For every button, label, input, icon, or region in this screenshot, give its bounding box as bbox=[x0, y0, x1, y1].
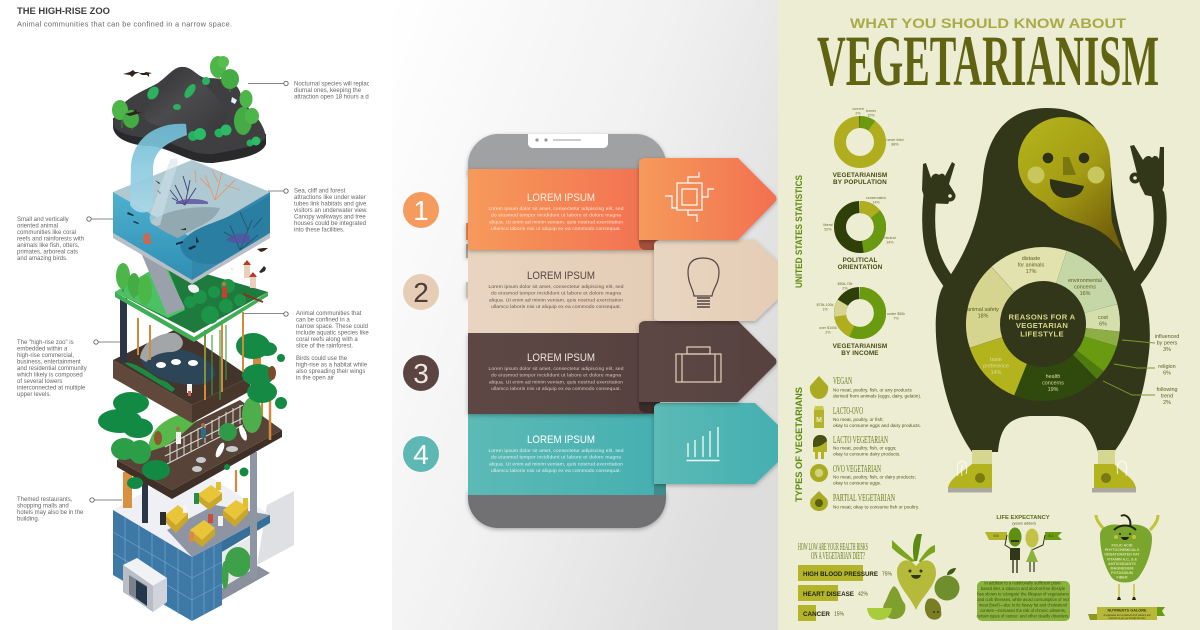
band 1: orange: aliqua. Ut enim ad minim veniam, quis nostrud exercitation bbox=[489, 219, 623, 225]
type: vegan: VEGAN bbox=[833, 376, 852, 387]
text block: life expectancy: certain types of cancer, and other deadly disorders. bbox=[977, 614, 1069, 618]
step number 2: 2 bbox=[413, 277, 429, 308]
type: ovo vegetarian: No meat, poultry, fish, or dairy products; bbox=[833, 474, 916, 480]
donut chart: political orientation: 34% bbox=[886, 240, 894, 244]
donut chart: vegetarianism by income: $50k-75k bbox=[838, 282, 853, 286]
text block: life expectancy bbox=[977, 580, 1070, 621]
band 2: beige bbox=[468, 250, 654, 333]
icon: egg bbox=[810, 464, 828, 482]
callout: animal communities and birds bbox=[243, 311, 369, 382]
band 2: beige: Lorem ipsum dolor sit amet, consectetur adipiscing elit, sed bbox=[488, 284, 624, 290]
callout: nocturnal species bbox=[248, 81, 375, 100]
leader lines and outside labels: religion bbox=[1158, 364, 1176, 370]
donut chart: vegetarianism by income: $75k-100k bbox=[817, 303, 834, 307]
entrance bbox=[123, 558, 167, 586]
donut chart: vegetarianism by income: 2% bbox=[842, 286, 848, 290]
phone notch bbox=[528, 134, 608, 148]
waterfall bbox=[130, 124, 187, 226]
donut chart: political orientation: liberal bbox=[823, 223, 833, 227]
donut centre label: LIFESTYLE bbox=[1020, 330, 1064, 338]
section: health risks bbox=[798, 542, 893, 621]
callout: high-rise zoo embedded bbox=[16, 340, 120, 398]
bar: heart disease: HEART DISEASE bbox=[803, 591, 855, 598]
callout: animal communities and birds: in the open air bbox=[296, 376, 334, 382]
type: lacto vegetarian: No meat, poultry, fish, or eggs; bbox=[833, 446, 896, 450]
type: ovo vegetarian: OVO VEGETARIAN bbox=[833, 464, 881, 475]
text block: life expectancy: based diet, a tobacco and alcohol-free lifestyle bbox=[981, 586, 1066, 591]
callout: themed restaurants bbox=[17, 497, 122, 522]
donut segment labels: concerns bbox=[1074, 284, 1096, 290]
text block: life expectancy: content—increases the risk of chronic ailments, bbox=[980, 608, 1066, 613]
heading: life expectancy bbox=[996, 515, 1050, 526]
section: health risks: HOW LOW ARE YOUR HEALTH RISKS bbox=[798, 542, 868, 553]
ground floor building bbox=[113, 452, 270, 621]
icon: bar chart bbox=[686, 427, 720, 460]
aquarium tank bbox=[113, 160, 270, 284]
chute below the tank bbox=[142, 253, 185, 315]
section: health risks: ON A VEGETARIAN DIET? bbox=[811, 551, 865, 562]
pepper character: MAGNESIUM bbox=[1111, 566, 1133, 570]
step number 2 bbox=[403, 274, 439, 310]
callout: small and vertically oriented: animals like fish, otters, bbox=[17, 243, 80, 249]
donut chart: vegetarianism by income: under $50k bbox=[887, 312, 905, 316]
floating mountain island bbox=[112, 56, 266, 163]
icon: milk carton: M bbox=[816, 417, 822, 424]
banner: nutrients galore: A vegetarian diet is packed full of vitamins and bbox=[1103, 614, 1151, 617]
step number 3 bbox=[403, 355, 439, 391]
pepper character: FIBER bbox=[1116, 576, 1128, 580]
birds over the mountain bbox=[123, 70, 152, 116]
donut centre label: VEGETARIAN bbox=[1016, 321, 1068, 330]
flag 2: beige bulb bbox=[654, 240, 778, 321]
callout: sea, cliff and forest: visitors an underwater view. bbox=[294, 208, 368, 214]
panel: vegetarianism infographic bbox=[778, 0, 1200, 630]
couple with flags: 9.5 bbox=[994, 534, 998, 538]
donut chart: political orientation bbox=[823, 196, 896, 271]
donut chart: vegetarianism by population: never tried bbox=[887, 138, 903, 142]
band 1: orange: do eiusmod tempor incididunt ut labore et dolore magna bbox=[491, 213, 621, 219]
leader lines and outside labels: 3% bbox=[1163, 347, 1171, 353]
band 1: orange: Lorem ipsum dolor sit amet, consectetur adipiscing elit, sed bbox=[488, 206, 624, 212]
character: smiling avocado-like figure bbox=[922, 108, 1179, 492]
callout: themed restaurants: shopping malls and bbox=[17, 504, 69, 510]
couple with flags: 6.1 bbox=[1048, 534, 1054, 538]
callout: animal communities and birds: can be confined in a bbox=[296, 318, 350, 324]
donut segment labels: health bbox=[1046, 374, 1060, 380]
callout: small and vertically oriented: communities like coral bbox=[17, 230, 76, 236]
callout: animal communities and birds: include aquatic species like bbox=[296, 330, 369, 336]
banner: nutrients galore bbox=[1088, 607, 1165, 620]
band 2: beige: do eiusmod tempor incididunt ut labore et dolore magna bbox=[491, 291, 621, 297]
donut segment labels: taste bbox=[990, 357, 1002, 363]
heading: life expectancy: LIFE EXPECTANCY bbox=[996, 515, 1050, 521]
callout: themed restaurants: building. bbox=[17, 516, 40, 522]
donut segment labels: environmental bbox=[1068, 278, 1102, 284]
callout: high-rise zoo embedded: embedded within a bbox=[17, 346, 68, 352]
band 4: teal bbox=[468, 414, 666, 495]
leader lines and outside labels: influenced bbox=[1155, 334, 1179, 340]
donut segment labels: concerns bbox=[1042, 380, 1064, 386]
bar: cancer: CANCER bbox=[803, 611, 830, 618]
callout: small and vertically oriented: Small and vertically bbox=[17, 217, 69, 223]
type: lacto-ovo: No meat, poultry, or fish; bbox=[833, 417, 884, 422]
callout: small and vertically oriented: and amazing birds. bbox=[17, 256, 68, 262]
poles and vines bbox=[120, 298, 243, 400]
donut chart: vegetarianism by population: 88% bbox=[891, 142, 899, 146]
callout: sea, cliff and forest: Canopy walkways and tree bbox=[294, 214, 366, 220]
heading: health risks bbox=[798, 542, 868, 562]
arms and hands bbox=[922, 145, 1164, 284]
pepper character: FOLIC ACID bbox=[1112, 544, 1133, 548]
donut chart: political orientation: conservative bbox=[866, 196, 886, 200]
subtitle: Animal communities that can be confined in a narrow space. bbox=[17, 20, 232, 28]
bar: cancer: 15% bbox=[834, 612, 845, 618]
band 3: brown: ullamco laboris nisi ut aliquip ex ea commodo consequat. bbox=[491, 386, 621, 392]
bar: high blood pressure: 75% bbox=[882, 572, 893, 578]
coral bbox=[170, 176, 196, 205]
right leg and shoe bbox=[1092, 450, 1136, 492]
restaurant tables and guests bbox=[160, 482, 248, 547]
callout: high-rise zoo embedded: The "high-rise zoo" is bbox=[17, 340, 74, 346]
bar: high blood pressure: HIGH BLOOD PRESSURE bbox=[803, 571, 879, 578]
donut chart: vegetarianism by income: BY INCOME bbox=[841, 350, 879, 357]
flag 4: teal chart bbox=[654, 403, 778, 484]
donut chart: political orientation: neutral bbox=[884, 236, 896, 240]
type: ovo vegetarian: okay to consume eggs. bbox=[833, 480, 881, 486]
callout: sea, cliff and forest: Sea, cliff and forest bbox=[294, 188, 346, 194]
donut chart: vegetarianism by income: VEGETARIANISM bbox=[833, 343, 887, 350]
donut chart: vegetarianism by population: VEGETARIANISM bbox=[833, 172, 887, 179]
pepper character: ANTIOXIDANTS bbox=[1108, 562, 1136, 566]
band 4: teal: do eiusmod tempor incididunt ut labore et dolore magna bbox=[491, 455, 621, 461]
donut chart: vegetarianism by income: over $100k bbox=[819, 326, 837, 330]
fold ribbons bbox=[639, 238, 666, 495]
donut segment labels: preference bbox=[983, 364, 1009, 370]
donut chart: reasons for a vegetarian lifestyle bbox=[958, 239, 1128, 409]
callout: sea, cliff and forest: houses could be integrated bbox=[294, 221, 366, 227]
flag 1: orange chip bbox=[639, 158, 776, 240]
callout: small and vertically oriented: oriented animal bbox=[17, 224, 58, 230]
callout: small and vertically oriented: reefs and rainforests with bbox=[17, 236, 84, 242]
callout: animal communities and birds: narrow space. These could bbox=[296, 324, 368, 330]
icon: light bulb bbox=[688, 258, 719, 307]
callout: animal communities and birds: Birds could use the bbox=[296, 356, 348, 362]
green rooftop platform bbox=[115, 248, 268, 342]
callout: themed restaurants: hotels may also be in the bbox=[17, 510, 84, 516]
donut chart: political orientation: 14% bbox=[872, 200, 880, 204]
pepper character: POTASSIUM bbox=[1111, 571, 1133, 575]
callout: high-rise zoo embedded: business, entertainment bbox=[17, 360, 81, 366]
donut chart: vegetarianism by population: 2% bbox=[855, 112, 861, 116]
donut chart: vegetarianism by population: 10% bbox=[867, 114, 875, 118]
title: the high-rise zoo: THE HIGH-RISE ZOO bbox=[17, 6, 110, 16]
donut centre label: REASONS FOR A bbox=[1009, 312, 1076, 322]
vertical label: types of vegetarians: TYPES OF VEGETARIANS bbox=[794, 387, 805, 502]
donut chart: vegetarianism by income: 7% bbox=[893, 316, 899, 320]
callout: sea, cliff and forest: attractions like under water bbox=[294, 195, 366, 201]
type: partial vegetarian bbox=[810, 491, 919, 511]
donut segment labels bbox=[967, 256, 1108, 393]
callout: high-rise zoo embedded: interconnected at multiple bbox=[17, 386, 86, 392]
illustration: beet and friends bbox=[867, 534, 960, 620]
icon: leaf bbox=[810, 376, 828, 399]
step number 3: 3 bbox=[413, 358, 429, 389]
type: lacto-ovo: okay to consume eggs and dairy products. bbox=[833, 423, 921, 428]
donut segment labels: animal safety bbox=[967, 307, 999, 313]
callout: sea, cliff and forest: into these facilities. bbox=[294, 228, 345, 234]
donut chart: political orientation: POLITICAL bbox=[842, 257, 878, 264]
pepper character: UNSATURATED FAT bbox=[1104, 552, 1140, 556]
bar: high blood pressure bbox=[798, 565, 893, 581]
donut chart: vegetarianism by population: former bbox=[866, 109, 877, 113]
icon: fish drop bbox=[810, 491, 828, 511]
body silhouette bbox=[936, 108, 1150, 452]
band 3: brown: Lorem ipsum dolor sit amet, consectetur adipiscing elit, sed bbox=[488, 366, 624, 372]
callout: high-rise zoo embedded: upper levels. bbox=[17, 392, 51, 398]
section: nutrients pepper bbox=[1088, 515, 1165, 620]
donut segment labels: 6% bbox=[1099, 322, 1107, 328]
type: lacto-ovo bbox=[814, 406, 921, 428]
donut centre label bbox=[1009, 312, 1076, 338]
band 2: beige: ullamco laboris nisi ut aliquip ex ea commodo consequat. bbox=[491, 304, 621, 310]
callout: animal communities and birds: high-rise as a habitat while bbox=[296, 362, 368, 368]
donut segment labels: 16% bbox=[1080, 291, 1091, 297]
section: life expectancy bbox=[977, 515, 1070, 621]
couple with flags bbox=[985, 528, 1062, 573]
bar: heart disease: 42% bbox=[858, 592, 869, 598]
banner: nutrients galore: nutrients to get you through the day! bbox=[1109, 617, 1146, 620]
donut chart: vegetarianism by income bbox=[817, 282, 905, 357]
donut segment labels: cost bbox=[1098, 315, 1108, 321]
pond platform bbox=[113, 328, 250, 423]
callout: sea, cliff and forest: tubes link habitats and give bbox=[294, 202, 367, 208]
band 4: teal: ullamco laboris nisi ut aliquip ex ea commodo consequat. bbox=[491, 468, 621, 474]
leader lines and outside labels: by peers bbox=[1157, 340, 1178, 346]
callout: nocturnal species: attraction open 18 hours a day bbox=[294, 94, 375, 100]
type: lacto vegetarian bbox=[813, 435, 900, 459]
face bbox=[1018, 117, 1123, 253]
pepper character: VITAMIN A,C, & E bbox=[1107, 558, 1138, 562]
callout: high-rise zoo embedded: of several towers bbox=[17, 379, 62, 385]
donut chart: political orientation: 52% bbox=[824, 228, 832, 232]
leader lines and outside labels: 2% bbox=[1163, 400, 1171, 406]
boardwalk platform bbox=[117, 370, 282, 508]
illustration: isometric high-rise zoo bbox=[98, 56, 294, 621]
band 1: orange: ullamco laboris nisi ut aliquip ex ea commodo consequat. bbox=[491, 226, 621, 232]
donut segment labels: 18% bbox=[978, 314, 989, 320]
donut chart: political orientation: ORIENTATION bbox=[838, 264, 883, 271]
callout: nocturnal species: diurnal ones, keeping the bbox=[294, 88, 362, 94]
type: lacto vegetarian: okay to consume dairy products. bbox=[833, 452, 900, 456]
tree canopy beside the pond bbox=[236, 333, 287, 440]
donut segment labels: 14% bbox=[991, 370, 1002, 376]
band 2: beige: LOREM IPSUM bbox=[527, 270, 595, 282]
callout: themed restaurants: Themed restaurants, bbox=[17, 497, 73, 503]
pepper character bbox=[1096, 515, 1158, 600]
callout: high-rise zoo embedded: high-rise commercial, bbox=[17, 353, 74, 359]
bar: heart disease bbox=[798, 585, 869, 601]
leader lines and outside labels: following bbox=[1157, 387, 1177, 393]
panel: the high-rise zoo bbox=[17, 8, 369, 621]
panel: phone infographic bbox=[392, 0, 778, 630]
text block: life expectancy: and curb illnesses, while avoid consumption of red bbox=[977, 597, 1069, 602]
callout: nocturnal species: Nocturnal species will replace bbox=[294, 82, 374, 88]
banner: nutrients galore: NUTRIENTS GALORE bbox=[1107, 608, 1147, 612]
donut segment labels: 17% bbox=[1026, 269, 1037, 275]
band 3: brown bbox=[468, 333, 654, 414]
vertical label: united states statistics: UNITED STATES STATISTICS bbox=[794, 175, 805, 288]
callout: animal communities and birds: slice of the rainforest. bbox=[296, 344, 353, 350]
pepper character: PHYTOCHEMICALS bbox=[1105, 548, 1140, 552]
type: partial vegetarian: PARTIAL VEGETARIAN bbox=[833, 493, 895, 504]
type: partial vegetarian: No meat; okay to consume fish or poultry. bbox=[833, 504, 919, 510]
band 1: orange: LOREM IPSUM bbox=[527, 192, 595, 204]
callout: small and vertically oriented: primates, arboreal cats bbox=[17, 250, 78, 256]
back wall of the ground floor bbox=[257, 491, 294, 565]
flag 3: brown briefcase bbox=[639, 321, 776, 402]
donut chart: vegetarianism by population: BY POPULATION bbox=[833, 179, 887, 186]
step number 1 bbox=[403, 192, 439, 228]
donut chart: vegetarianism by income: 1% bbox=[822, 308, 828, 312]
type: vegan: No meat, poultry, fish, or any products bbox=[833, 388, 913, 392]
band 4: teal: Lorem ipsum dolor sit amet, consectetur adipiscing elit, sed bbox=[488, 448, 624, 454]
type: lacto-ovo: LACTO-OVO bbox=[833, 406, 863, 417]
band 1: orange bbox=[468, 169, 654, 250]
callout: animal communities and birds: also spreading their wings bbox=[296, 369, 365, 375]
callout: high-rise zoo embedded: which likely is composed bbox=[16, 372, 83, 378]
band 3: brown: do eiusmod tempor incididunt ut labore et dolore magna bbox=[491, 373, 621, 379]
band 3: brown: LOREM IPSUM bbox=[527, 352, 595, 364]
donut segment labels: distaste bbox=[1022, 256, 1040, 262]
step number 4: 4 bbox=[413, 439, 429, 470]
heading: WHAT YOU SHOULD KNOW ABOUT bbox=[850, 15, 1127, 31]
type: vegan bbox=[810, 376, 921, 399]
phone body bbox=[466, 134, 666, 528]
donut chart: vegetarianism by population bbox=[833, 107, 903, 186]
step number 4 bbox=[403, 436, 439, 472]
donut segment labels: 19% bbox=[1048, 387, 1059, 393]
heading: life expectancy: (years added) bbox=[1012, 522, 1036, 526]
donut chart: vegetarianism by income: 2% bbox=[825, 330, 831, 334]
leader lines and outside labels: 6% bbox=[1163, 370, 1171, 376]
type: ovo vegetarian bbox=[810, 464, 916, 486]
leader lines and outside labels bbox=[1103, 334, 1179, 406]
band 4: teal: aliqua. Ut enim ad minim veniam, quis nostrud exercitation bbox=[489, 461, 623, 467]
callout: animal communities and birds: coral reefs along with a bbox=[296, 337, 358, 343]
callout: high-rise zoo embedded: and residential community bbox=[17, 366, 87, 372]
text block: life expectancy: In addition to a nutritionally sufficient plant- bbox=[984, 580, 1062, 586]
left leg and shoe bbox=[948, 450, 992, 492]
callout: small and vertically oriented bbox=[17, 217, 113, 262]
bar: cancer bbox=[798, 605, 845, 621]
callout: animal communities and birds: Animal communities that bbox=[296, 311, 362, 317]
donut chart: vegetarianism by population: current bbox=[852, 107, 864, 111]
band 4: teal: LOREM IPSUM bbox=[527, 434, 595, 446]
icon: pop bbox=[813, 435, 827, 459]
callout: sea, cliff and forest bbox=[268, 188, 368, 234]
boardwalk rail bbox=[165, 405, 243, 465]
leader lines and outside labels: trend bbox=[1161, 394, 1173, 400]
large trees on the left bbox=[98, 392, 248, 489]
type: vegan: derived from animals (eggs, dairy, gelatin). bbox=[833, 394, 921, 398]
step number 1: 1 bbox=[413, 195, 429, 226]
donut segment labels: for animals bbox=[1018, 262, 1044, 268]
band 3: brown: aliqua. Ut enim ad minim veniam, quis nostrud exercitation bbox=[489, 379, 623, 385]
text block: life expectancy: meat (beef)—due to its heavy fat and cholesterol bbox=[979, 602, 1067, 608]
icon: briefcase bbox=[676, 347, 721, 382]
text block: life expectancy: has shown to 'elongate' the lifespan of vegetarians bbox=[977, 592, 1069, 596]
type: lacto vegetarian: LACTO VEGETARIAN bbox=[833, 435, 888, 446]
icon: circuit chip bbox=[665, 172, 714, 222]
band 2: beige: aliqua. Ut enim ad minim veniam, quis nostrud exercitation bbox=[489, 297, 623, 303]
